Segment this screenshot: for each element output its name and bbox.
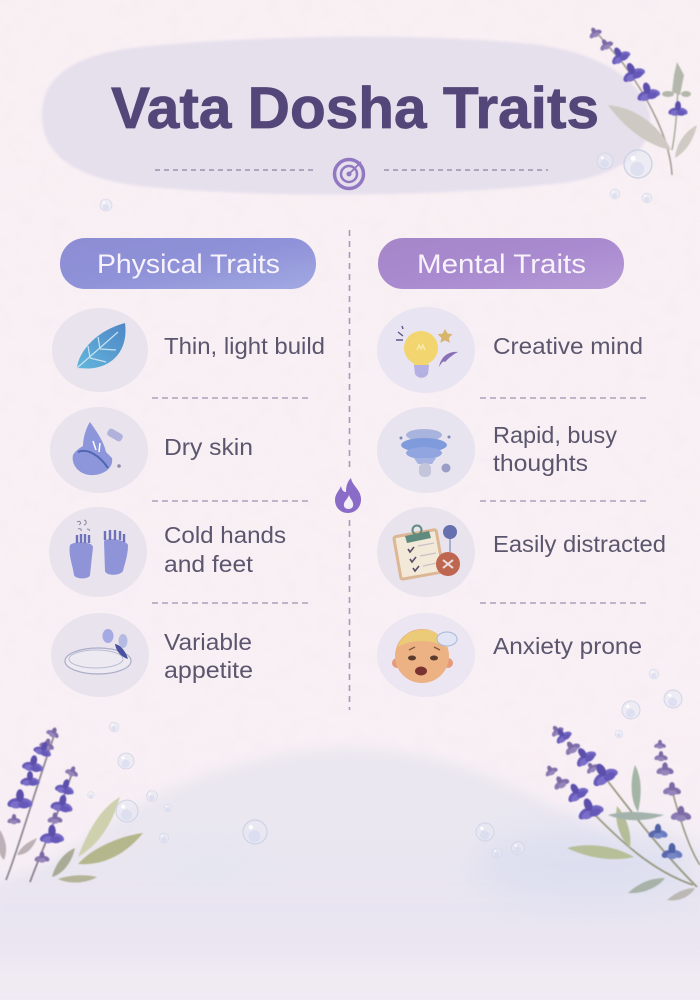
item: dry skin [50,407,253,493]
top water droplets [100,150,652,211]
item: cold hands and feet [49,507,286,597]
ground wash with hill [0,748,700,1000]
item: easily distracted [377,507,666,597]
item: thin light build [52,308,325,392]
title banner wash [42,37,650,195]
item: variable appetite [51,613,253,697]
row dividers right [480,398,648,603]
title divider with spiral icon [155,160,548,188]
item: rapid busy thoughts [377,407,617,493]
item: creative mind: Creative mind [493,333,643,359]
panel: physical traits header [60,238,316,289]
center dashed divider [348,230,350,710]
item: variable appetite: appetite [164,657,253,683]
item: rapid busy thoughts: Rapid, busy [493,422,617,448]
bottom left droplets [88,722,267,844]
panel: physical traits list [49,308,325,697]
item: cold hands and feet: and feet [164,551,253,577]
bottom right lavender [542,722,700,900]
panel: physical traits header: Physical Traits [97,249,280,279]
bottom left lavender [0,724,143,883]
icon: flame [335,478,361,513]
panel: mental traits list [377,307,666,697]
item: rapid busy thoughts: thoughts [493,450,588,476]
top right lavender sprig [586,24,697,175]
title: Vata Dosha Traits [111,76,599,141]
item: cold hands and feet: Cold hands [164,522,286,548]
item: anxiety prone [377,613,642,697]
item: creative mind [377,307,643,393]
panel: mental traits header: Mental Traits [417,249,586,279]
item: variable appetite: Variable [164,629,252,655]
row dividers left [152,398,308,603]
bottom right droplets [476,669,682,858]
item: dry skin: Dry skin [164,434,253,460]
item: thin light build: Thin, light build [164,333,325,359]
panel: mental traits header [378,238,624,289]
item: anxiety prone: Anxiety prone [493,633,642,659]
item: easily distracted: Easily distracted [493,531,666,557]
